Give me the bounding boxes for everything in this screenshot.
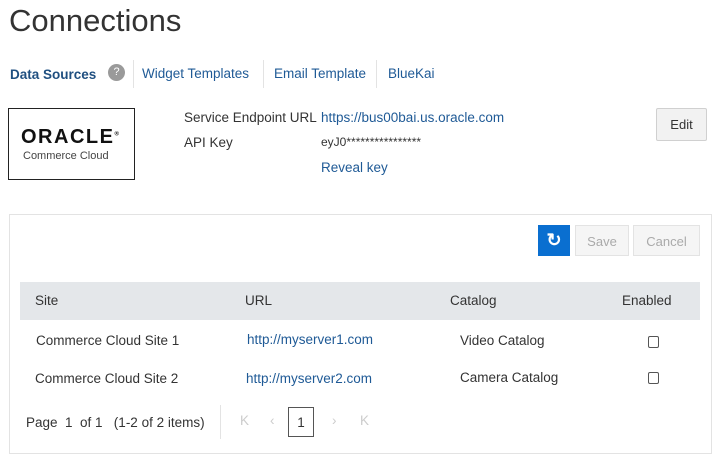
save button (575, 225, 629, 256)
table header (20, 282, 700, 320)
row 1: Video Catalog (460, 333, 545, 348)
service info: Reveal key (321, 160, 388, 175)
logo box: Commerce Cloud (23, 150, 109, 162)
row 2: http://myserver2.com (246, 371, 372, 386)
row 2: Camera Catalog (460, 370, 558, 385)
table header: Site (35, 293, 58, 308)
row 2 (35, 370, 659, 386)
service info: API Key (184, 135, 233, 150)
cancel button: Cancel (646, 234, 687, 249)
service info: Service Endpoint URL (184, 110, 317, 125)
table header: Enabled (622, 293, 672, 308)
edit button: Edit (670, 117, 693, 132)
pagination: › (332, 413, 336, 428)
table header: URL (245, 293, 272, 308)
refresh button: ↻ (546, 230, 562, 250)
tabs: Email Template (274, 66, 366, 81)
row 1 (36, 332, 659, 348)
pagination: K (360, 413, 369, 428)
panel: sites table (9, 214, 712, 454)
row 1: http://myserver1.com (247, 332, 373, 347)
cancel button (633, 225, 700, 256)
icon: help: ? (113, 66, 120, 78)
logo box (8, 108, 135, 180)
service info: https://bus00bai.us.oracle.com (321, 110, 504, 125)
service info: eyJ0**************** (321, 135, 421, 149)
tabs: Data Sources (10, 67, 96, 82)
table header: Catalog (450, 293, 497, 308)
logo box: ORACLE® (21, 126, 120, 148)
pagination: K (240, 413, 249, 428)
tabs (10, 60, 435, 88)
edit button (656, 108, 707, 141)
tabs: BlueKai (388, 66, 435, 81)
pagination: 1 (297, 415, 305, 430)
pagination: Page 1 of 1 (1-2 of 2 items) (26, 415, 205, 430)
row 1: Commerce Cloud Site 1 (36, 333, 179, 348)
service info (184, 110, 504, 175)
pagination (26, 405, 369, 439)
title: Connections (9, 3, 181, 38)
tabs: Widget Templates (142, 66, 249, 81)
save button: Save (587, 234, 617, 249)
row 2: Commerce Cloud Site 2 (35, 371, 178, 386)
refresh button (538, 225, 570, 256)
icon: help (108, 64, 125, 81)
pagination: ‹ (270, 413, 274, 428)
